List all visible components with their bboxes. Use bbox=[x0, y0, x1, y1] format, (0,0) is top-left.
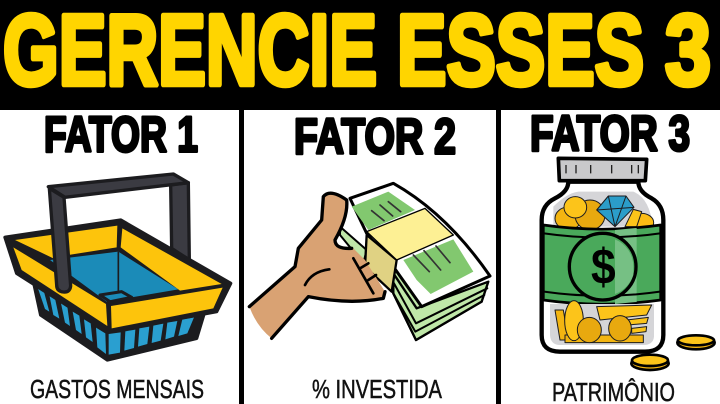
heading: fator 2: FATOR 2 bbox=[294, 108, 456, 164]
icon: jar of coins and diamond: $ bbox=[591, 239, 616, 295]
label: % investida: % INVESTIDA bbox=[312, 374, 443, 404]
label: gastos mensais: GASTOS MENSAIS bbox=[30, 374, 204, 404]
icon: shopping basket bbox=[5, 174, 231, 360]
icon: hand holding banknotes bbox=[249, 183, 490, 340]
coins at bottom bbox=[555, 301, 652, 343]
icon: jar of coins and diamond bbox=[542, 158, 715, 370]
loose coin right bbox=[677, 335, 715, 349]
coins and diamond at top bbox=[555, 196, 654, 232]
heading: fator 1: FATOR 1 bbox=[44, 106, 198, 162]
loose coin bottom bbox=[631, 355, 669, 370]
column dividers bbox=[239, 110, 501, 404]
